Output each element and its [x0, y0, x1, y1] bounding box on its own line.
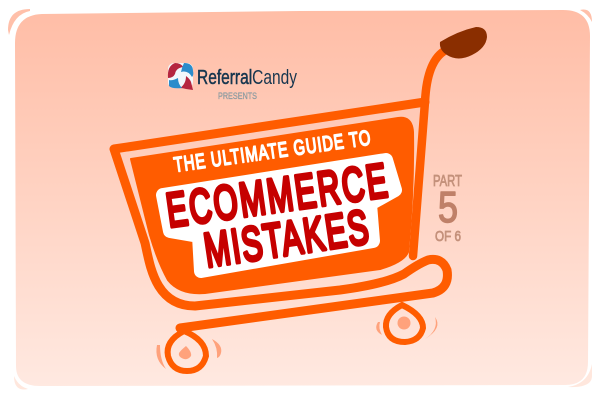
shopping cart — [114, 27, 487, 371]
logo wordmark: ReferralCandy — [197, 67, 297, 89]
cart pole — [413, 50, 446, 256]
icon: candy swirl — [168, 63, 193, 90]
cart handle grip — [440, 27, 487, 58]
white label blob — [163, 160, 395, 271]
logo — [168, 63, 297, 102]
part text: PART — [433, 173, 462, 190]
cart frame — [114, 102, 447, 328]
right wheel — [376, 305, 437, 342]
cart basket fill — [131, 118, 413, 293]
heading: mistakes: MISTAKES — [201, 200, 372, 278]
heading: ecommerce: ECOMMERCE — [163, 154, 390, 238]
presents label: PRESENTS — [218, 91, 257, 102]
left wheel — [156, 331, 221, 371]
heading: the ultimate guide to: THE ULTIMATE GUIDE TO — [172, 126, 372, 177]
part number: 5 — [438, 183, 458, 232]
part label — [433, 173, 462, 245]
of six text: OF 6 — [435, 228, 461, 245]
